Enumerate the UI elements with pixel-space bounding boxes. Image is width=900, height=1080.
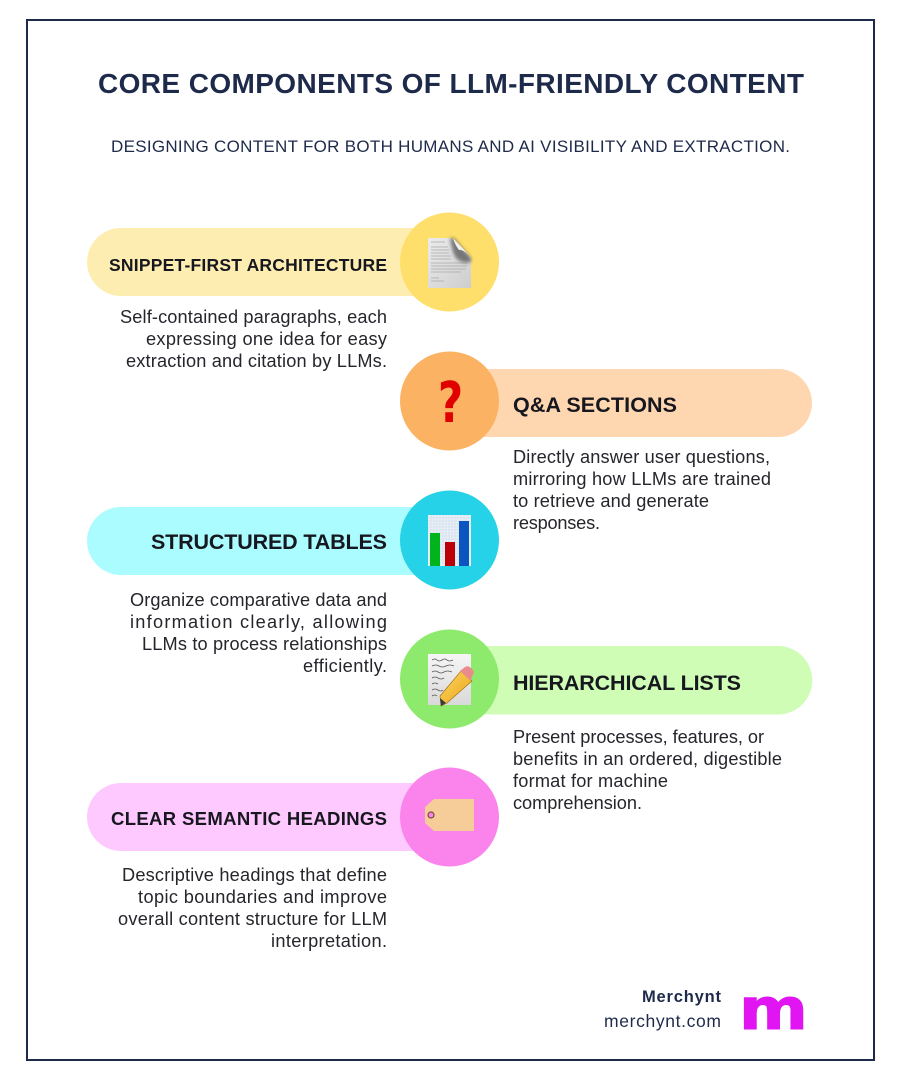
pill <box>87 228 450 296</box>
pill <box>450 369 812 437</box>
description: Present processes, features, or <box>513 727 764 747</box>
circle <box>400 212 499 312</box>
icon: tag <box>425 799 474 831</box>
brand url: merchynt.com <box>604 1011 721 1031</box>
panel: clear semantic headings <box>87 768 499 951</box>
description: format for machine <box>513 771 668 791</box>
title: CORE COMPONENTS OF LLM-FRIENDLY CONTENT <box>98 68 804 99</box>
description: extraction and citation by LLMs. <box>126 351 387 371</box>
description: Organize comparative data and <box>130 590 387 610</box>
description: comprehension. <box>513 793 642 813</box>
description <box>118 865 387 951</box>
icon: question mark: ? <box>438 370 463 435</box>
heading: HIERARCHICAL LISTS <box>513 671 741 695</box>
icon: bar chart <box>428 515 471 566</box>
panel: Q&A sections <box>400 352 812 533</box>
description: information clearly, allowing <box>130 612 387 632</box>
panel: hierarchical lists <box>400 630 812 813</box>
heading: CLEAR SEMANTIC HEADINGS <box>111 808 387 829</box>
subtitle: DESIGNING CONTENT FOR BOTH HUMANS AND AI VISIBILITY AND EXTRACTION. <box>111 137 790 156</box>
panel: snippet-first architecture <box>87 212 499 371</box>
description <box>130 590 387 676</box>
pill <box>87 507 450 575</box>
description: LLMs to process relationships <box>142 634 387 654</box>
description <box>120 307 388 371</box>
heading: STRUCTURED TABLES <box>151 530 387 554</box>
circle <box>400 490 499 590</box>
description: benefits in an ordered, digestible <box>513 749 782 769</box>
description <box>513 727 782 813</box>
description: to retrieve and generate <box>513 491 709 511</box>
description: efficiently. <box>303 656 387 676</box>
description: overall content structure for LLM <box>118 909 387 929</box>
icon: note and pencil <box>428 654 474 706</box>
heading: Q&A SECTIONS <box>513 393 677 417</box>
description: Self-contained paragraphs, each <box>120 307 387 327</box>
description: interpretation. <box>271 931 387 951</box>
description <box>513 447 771 533</box>
circle <box>400 768 499 866</box>
icon: document <box>428 238 471 288</box>
brand name: Merchynt <box>642 988 722 1006</box>
pill <box>87 783 450 851</box>
footer brand <box>604 976 808 1043</box>
circle <box>400 352 499 450</box>
pill <box>450 646 812 714</box>
description: Directly answer user questions, <box>513 447 770 467</box>
description: topic boundaries and improve <box>138 887 387 907</box>
logo: m <box>739 976 808 1043</box>
description: Descriptive headings that define <box>122 865 387 885</box>
circle <box>400 630 499 728</box>
description: responses. <box>513 513 600 533</box>
heading: SNIPPET-FIRST ARCHITECTURE <box>109 255 387 275</box>
description: mirroring how LLMs are trained <box>513 469 771 489</box>
panel: structured tables <box>87 490 499 676</box>
description: expressing one idea for easy <box>146 329 388 349</box>
